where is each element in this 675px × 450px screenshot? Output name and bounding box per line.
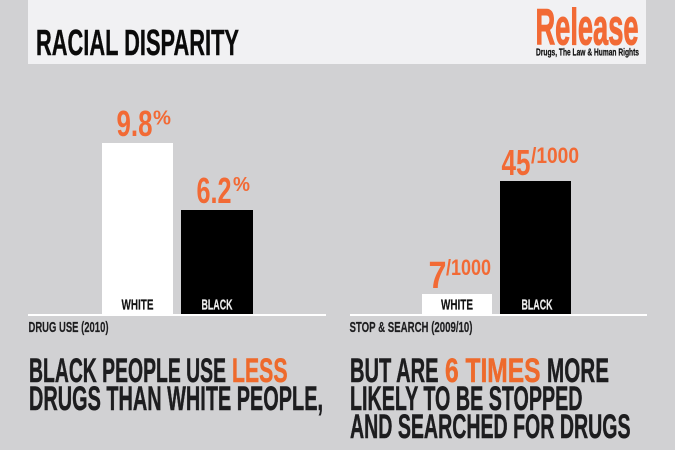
bar: white 7/1000: [422, 294, 492, 314]
statement: right: BUT ARE: [350, 352, 438, 390]
axis line: [350, 314, 647, 316]
statement: left: [29, 352, 323, 418]
statement: left: BLACK PEOPLE USE: [29, 352, 226, 390]
value: 45/1000: 45: [502, 142, 530, 183]
statement: left: DRUGS THAN WHITE PEOPLE,: [29, 380, 323, 418]
chart caption: STOP & SEARCH (2009/10): [350, 319, 473, 336]
bar: white 9.8%: WHITE: [122, 296, 154, 314]
bar: white 7/1000: WHITE: [441, 296, 473, 314]
axis line: [28, 314, 326, 316]
statement: right: MORE: [547, 352, 609, 390]
bar: white 9.8%: [102, 143, 173, 314]
panel: drug use chart: [28, 103, 326, 336]
value: 6.2%: 6.2: [196, 170, 232, 211]
value: 7/1000: 7: [428, 255, 446, 297]
value: 45/1000: [502, 142, 579, 183]
header band: [28, 0, 646, 64]
value: 9.8%: %: [153, 108, 171, 130]
bar: black 45/1000: BLACK: [522, 296, 553, 314]
value: 6.2%: %: [233, 174, 250, 196]
value: 7/1000: [428, 255, 491, 297]
bar: black 6.2%: [181, 210, 253, 314]
bar: black 45/1000: [500, 181, 571, 314]
statement: left: LESS: [232, 352, 288, 390]
chart caption: DRUG USE (2010): [28, 319, 109, 336]
statement: right: 6 TIMES: [445, 352, 540, 390]
value: 7/1000: /1000: [446, 255, 491, 280]
title: RACIAL DISPARITY: [36, 22, 239, 63]
statement: right: [350, 352, 630, 446]
value: 45/1000: /1000: [531, 143, 579, 168]
value: 9.8%: 9.8: [116, 103, 152, 144]
panel: stop and search chart: [350, 142, 647, 336]
bar: black 6.2%: BLACK: [202, 296, 233, 314]
